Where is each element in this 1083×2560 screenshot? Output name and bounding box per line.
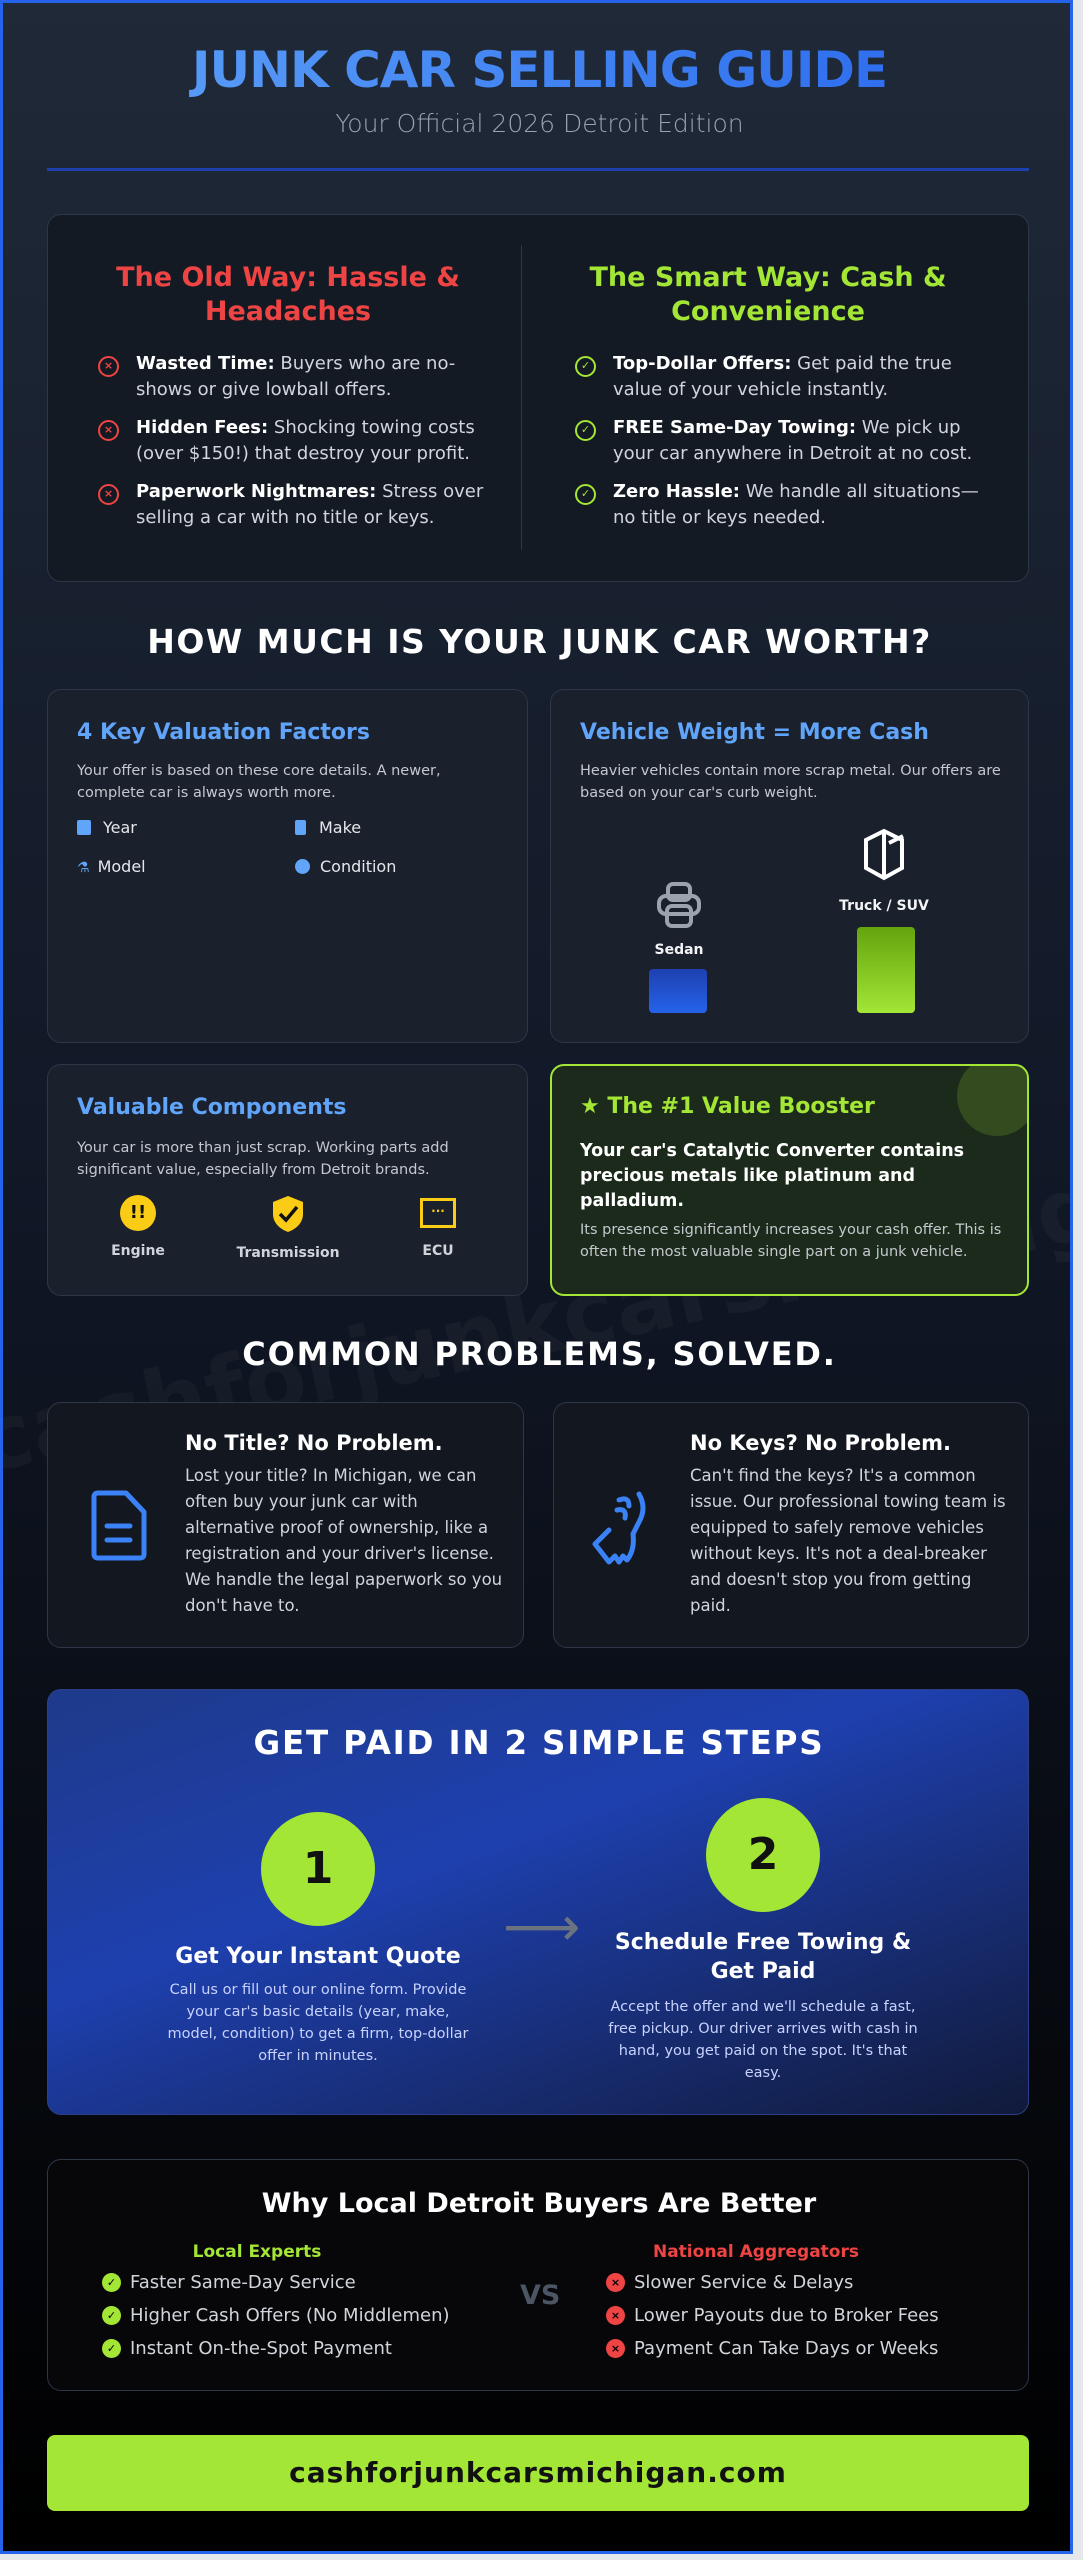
icon: transmission (236, 1196, 340, 1261)
icon: ecu (420, 1198, 456, 1259)
factor list: Condition (320, 857, 396, 876)
list: local: Local Experts (193, 2242, 321, 2262)
card: vehicle weight: Vehicle Weight = More Cash (580, 720, 929, 745)
list: old way: × (104, 487, 113, 500)
factor list: Make (319, 818, 361, 837)
list: smart way (575, 353, 979, 528)
card: no keys: Can't find the keys? It's a common issue. Our professional towing team is equipped to safely remove vehicles without keys. It's not a deal-breaker and doesn't stop you from getting paid. (690, 1466, 1006, 1615)
icon: engine (111, 1195, 165, 1259)
card: vehicle weight (550, 689, 1029, 1043)
card: no keys: No Keys? No Problem. (690, 1431, 951, 1455)
card: no title: Lost your title? In Michigan, we can often buy your junk car with alternative proof of ownership, like a registration and your driver's license. We handle the legal paperwork so you don't have to. (185, 1466, 502, 1615)
heading: Why Local Detroit Buyers Are Better (262, 2188, 816, 2219)
card: vehicle weight: Heavier vehicles contain more scrap metal. Our offers are based on your car's curb weight. (580, 763, 1001, 801)
factor list: ⚗ Model (77, 857, 146, 876)
list: old way: × (104, 359, 113, 372)
card: no title: No Title? No Problem. (185, 1431, 443, 1455)
list: local: Faster Same-Day Service (130, 2272, 356, 2293)
list: national: × (611, 2309, 620, 2322)
list: national: Payment Can Take Days or Weeks (634, 2338, 938, 2359)
step 2: 2 (748, 1829, 778, 1880)
list: national: Slower Service & Delays (634, 2272, 853, 2293)
card: value booster: Your car's Catalytic Converter contains precious metals like platinum and palladium. (580, 1141, 964, 1211)
list: smart way: Zero Hassle: We handle all situations—no title or keys needed. (613, 481, 979, 528)
icon: ecu: ··· (431, 1204, 445, 1218)
panel: local vs national (47, 2159, 1029, 2391)
card: valuable components: Valuable Components (77, 1095, 346, 1120)
icon: engine: Engine (111, 1243, 165, 1259)
list: old way: × (104, 423, 113, 436)
icon: document (92, 1490, 146, 1560)
list: local: Higher Cash Offers (No Middlemen) (130, 2305, 450, 2326)
step 1: 1 (303, 1843, 333, 1894)
list: smart way: Top-Dollar Offers: Get paid the true value of your vehicle instantly. (613, 353, 952, 400)
label: truck: Truck / SUV (839, 898, 929, 914)
card: value booster: Its presence significantly increases your cash offer. This is often the most valuable single part on a junk vehicle. (580, 1222, 1001, 1260)
card: valuable components (47, 1064, 528, 1296)
arrow: ⟶ (503, 1895, 580, 1958)
heading: problems: COMMON PROBLEMS, SOLVED. (242, 1335, 837, 1373)
icon: engine: !! (130, 1202, 146, 1223)
footer: website: cashforjunkcarsmichigan.com (289, 2456, 787, 2489)
label: sedan: Sedan (654, 942, 704, 958)
list: local: ✓ (107, 2309, 116, 2322)
heading: old way: The Old Way: Hassle & Headaches (116, 262, 460, 327)
step 2 (608, 1798, 918, 2081)
bar: sedan (649, 969, 707, 1013)
list: national: × (611, 2276, 620, 2289)
heading: steps: GET PAID IN 2 SIMPLE STEPS (254, 1724, 824, 1762)
list: local: ✓ (107, 2342, 116, 2355)
card: value booster (550, 1064, 1029, 1296)
list: local: Instant On-the-Spot Payment (130, 2338, 392, 2359)
card: valuation factors: Your offer is based on these core details. A newer, complete car is always worth more. (77, 763, 441, 801)
step 1: Call us or fill out our online form. Provide your car's basic details (year, make, model, condition) to get a firm, top-dollar offer in minutes. (168, 1982, 468, 2064)
list: national: × (611, 2342, 620, 2355)
list: local (102, 2242, 450, 2359)
card: valuable components: Your car is more than just scrap. Working parts add significant value, especially from Detroit brands. (77, 1140, 449, 1178)
title: JUNK CAR SELLING GUIDE (192, 41, 887, 99)
list: smart way: FREE Same-Day Towing: We pick up your car anywhere in Detroit at no cost. (613, 417, 972, 464)
list: old way: Hidden Fees: Shocking towing costs (over $150!) that destroy your profit. (136, 417, 475, 464)
card: no title (47, 1402, 524, 1648)
subtitle: Your Official 2026 Detroit Edition (335, 109, 744, 138)
heading: worth: HOW MUCH IS YOUR JUNK CAR WORTH? (147, 622, 932, 661)
icon: transmission: Transmission (236, 1245, 340, 1261)
list: smart way: ✓ (581, 359, 590, 372)
icon: ecu: ECU (422, 1243, 454, 1259)
list: smart way: ✓ (581, 487, 590, 500)
heading: booster: ★ The #1 Value Booster (580, 1094, 875, 1119)
step 1 (168, 1812, 468, 2064)
panel: old vs smart way (47, 214, 1029, 582)
list: old way: Paperwork Nightmares: Stress over selling a car with no title or keys. (136, 481, 483, 528)
list: smart way: ✓ (581, 423, 590, 436)
factor list: Year (103, 818, 137, 837)
icon: truck (864, 828, 904, 880)
list: national: National Aggregators (653, 2242, 859, 2262)
card: no keys (553, 1402, 1029, 1648)
list: national: Lower Payouts due to Broker Fees (634, 2305, 939, 2326)
list: old way (98, 353, 484, 528)
title (3, 41, 1076, 99)
bar: truck (857, 927, 915, 1013)
footer: website (47, 2435, 1029, 2511)
factor list (77, 818, 396, 876)
panel: steps (47, 1689, 1029, 2115)
heading: smart way: The Smart Way: Cash & Convenience (589, 262, 947, 327)
icon: hand (592, 1492, 646, 1564)
icon: sedan (657, 882, 701, 928)
step 2: Accept the offer and we'll schedule a fast, free pickup. Our driver arrives with cash in hand, you get paid on the spot. It's that easy. (608, 1999, 918, 2081)
card: valuation factors (47, 689, 528, 1043)
card: valuation factors: 4 Key Valuation Factors (77, 720, 370, 745)
step 2: Schedule Free Towing & Get Paid (615, 1930, 911, 1984)
step 1: Get Your Instant Quote (175, 1944, 461, 1969)
vs: VS (520, 2280, 560, 2311)
list: national (606, 2242, 939, 2359)
list: local: ✓ (107, 2276, 116, 2289)
list: old way: Wasted Time: Buyers who are no-shows or give lowball offers. (136, 353, 455, 400)
